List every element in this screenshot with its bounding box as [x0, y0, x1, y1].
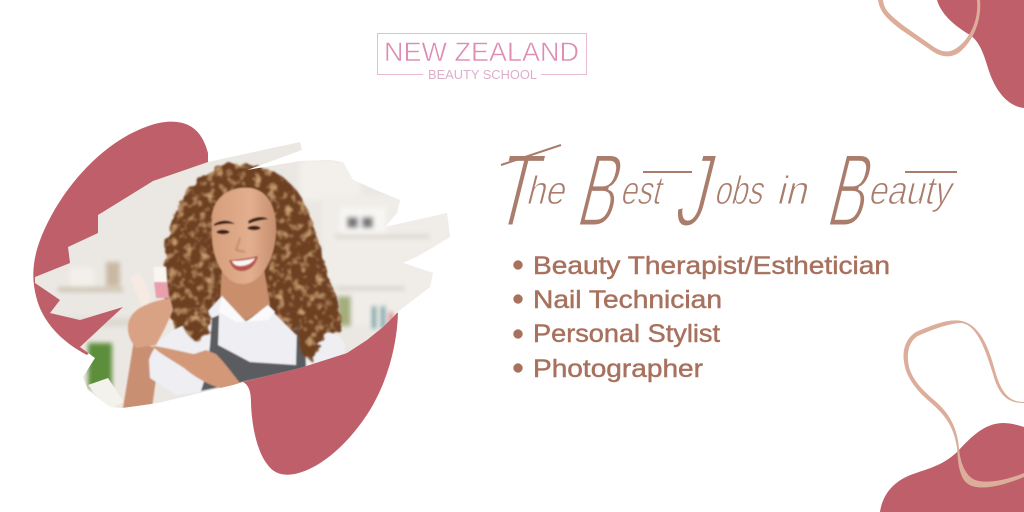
tube: [88, 378, 123, 407]
pointing hand: [152, 346, 241, 389]
photo background: [30, 140, 455, 410]
left arm: [122, 344, 156, 408]
title: J: [666, 132, 727, 249]
title: obs: [711, 168, 771, 213]
photo: beauty technician in a salon: [30, 140, 455, 410]
logo frame: [378, 34, 586, 74]
bottom right outline curve: [904, 320, 1024, 488]
collar: [219, 296, 275, 322]
grey apron: [201, 315, 306, 391]
logo subtitle: BEAUTY SCHOOL: [428, 68, 537, 82]
blurred salon shelves: [56, 206, 426, 392]
top right red shape: [937, 0, 1024, 108]
red blob behind photo: [33, 122, 398, 475]
title: T: [484, 132, 553, 249]
item: personal stylist: Personal Stylist: [533, 320, 720, 348]
job list: [514, 252, 890, 383]
title: eauty: [865, 168, 959, 213]
eyebrows and eyes: [214, 217, 268, 234]
title: he: [523, 168, 573, 213]
neck: [220, 270, 270, 322]
item: beauty therapist: Beauty Therapist/Esthetician: [533, 252, 890, 280]
bottom right red shape: [880, 423, 1024, 512]
title: B: [818, 132, 885, 249]
holding hand: [128, 298, 173, 348]
face: [212, 188, 276, 284]
logo: [378, 34, 586, 82]
front hair strands: [182, 310, 328, 364]
mouth: [229, 256, 258, 271]
person group: [123, 164, 345, 408]
title: B: [568, 132, 635, 249]
title: in: [774, 168, 815, 213]
nose shadow: [236, 238, 245, 252]
title: [484, 132, 968, 249]
white shirt: [149, 296, 345, 395]
logo name: NEW ZEALAND: [384, 37, 579, 67]
hair back: [163, 164, 341, 366]
title: est: [617, 168, 669, 213]
top right outline curve: [878, 0, 980, 56]
item: nail technician: Nail Technician: [533, 286, 722, 314]
item: photographer: Photographer: [533, 355, 703, 383]
nail polish bottles: [131, 273, 150, 305]
